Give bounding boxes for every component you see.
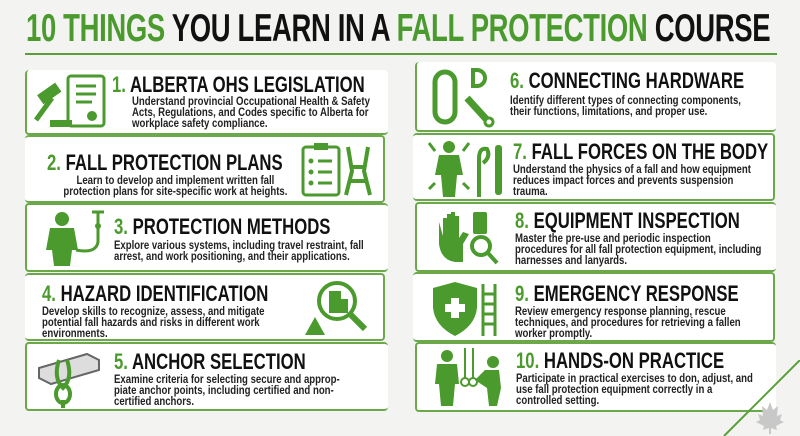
icon: clipboard and harness (302, 143, 372, 196)
icon: gavel and document (34, 74, 106, 128)
text: potential fall hazards and risks in different work (42, 315, 260, 329)
text: procedures for all fall protection equipment, including (515, 242, 761, 256)
panel: 2 fall protection plans (25, 135, 385, 203)
heading: 5. ANCHOR SELECTION (114, 349, 306, 374)
panel: 4 hazard identification (25, 273, 385, 341)
text (515, 231, 761, 267)
panel: 7 fall forces on the body (413, 133, 775, 201)
heading: 2. FALL PROTECTION PLANS (47, 150, 283, 175)
panel: 6 connecting hardware (415, 62, 776, 132)
panel: 3 protection methods (25, 203, 388, 272)
heading: 4. HAZARD IDENTIFICATION (42, 281, 268, 306)
heading: 1. ALBERTA OHS LEGISLATION (112, 72, 365, 97)
heading: 3. PROTECTION METHODS (114, 214, 330, 239)
icon: carabiners (432, 68, 494, 128)
icon: magnifier with building (305, 281, 368, 335)
text: Learn to develop and implement written fall (76, 173, 274, 187)
text (63, 173, 287, 198)
text: protection plans for site-specific work at heights. (63, 184, 287, 198)
icon: shield and ladder (433, 282, 496, 336)
text: techniques, and procedures for retrieving a fallen (515, 315, 741, 329)
text: Master the pre-use and periodic inspection (515, 231, 711, 245)
panel: 10 hands-on practice (415, 342, 776, 412)
text: trauma. (513, 184, 548, 198)
panel: 5 anchor selection (25, 342, 388, 411)
text: certified anchors. (114, 394, 194, 408)
text: worker promptly. (515, 326, 592, 340)
text (516, 371, 753, 407)
text (515, 304, 741, 340)
icon: glove, tag, magnifier (439, 212, 498, 264)
text: piate anchor points, including certified and non- (114, 383, 334, 397)
heading: 6. CONNECTING HARDWARE (510, 68, 744, 93)
heading: 10. HANDS-ON PRACTICE (516, 348, 724, 373)
text: environments. (42, 326, 108, 340)
text: Understand provincial Occupational Health & Safety (132, 94, 370, 108)
icon: body with forces (428, 141, 502, 197)
text: harnesses and lanyards. (515, 253, 627, 267)
icon: two workers practicing (435, 348, 501, 406)
heading: 9. EMERGENCY RESPONSE (515, 281, 739, 306)
decorative corner line and maple leaf (723, 360, 800, 436)
text: Identify different types of connecting components, (510, 93, 741, 107)
text: Review emergency response planning, rescue (515, 304, 726, 318)
text: workplace safety compliance. (132, 116, 268, 130)
text (132, 94, 370, 130)
title: 10 THINGS YOU LEARN IN A FALL PROTECTION COURSE (26, 7, 770, 50)
icon: anchor beam (38, 352, 100, 408)
panel: 9 emergency response (413, 272, 775, 342)
heading: 8. EQUIPMENT INSPECTION (515, 208, 740, 233)
text: controlled setting. (516, 393, 599, 407)
heading: 7. FALL FORCES ON THE BODY (513, 139, 768, 164)
text: reduces impact forces and prevents suspension (513, 173, 733, 187)
text: their functions, limitations, and proper use. (510, 104, 707, 118)
panel: 8 equipment inspection (415, 202, 776, 272)
text: Explore various systems, including travel restraint, fall (114, 238, 364, 252)
text: use fall protection equipment correctly in a (516, 382, 712, 396)
text (513, 162, 751, 198)
text: Develop skills to recognize, assess, and mitigate (42, 304, 264, 318)
text: Examine criteria for selecting secure and approp- (114, 372, 340, 386)
text: Understand the physics of a fall and how equipment (513, 162, 751, 176)
icon: worker in harness (46, 210, 104, 266)
text: Participate in practical exercises to don, adjust, and (516, 371, 753, 385)
text (114, 372, 340, 408)
text (42, 304, 264, 340)
text: arrest, and work positioning, and their applications. (114, 249, 350, 263)
text: Acts, Regulations, and Codes specific to Alberta for (132, 105, 368, 119)
panel: 1 alberta ohs legislation (25, 70, 388, 135)
text (114, 238, 364, 263)
text (510, 93, 741, 118)
